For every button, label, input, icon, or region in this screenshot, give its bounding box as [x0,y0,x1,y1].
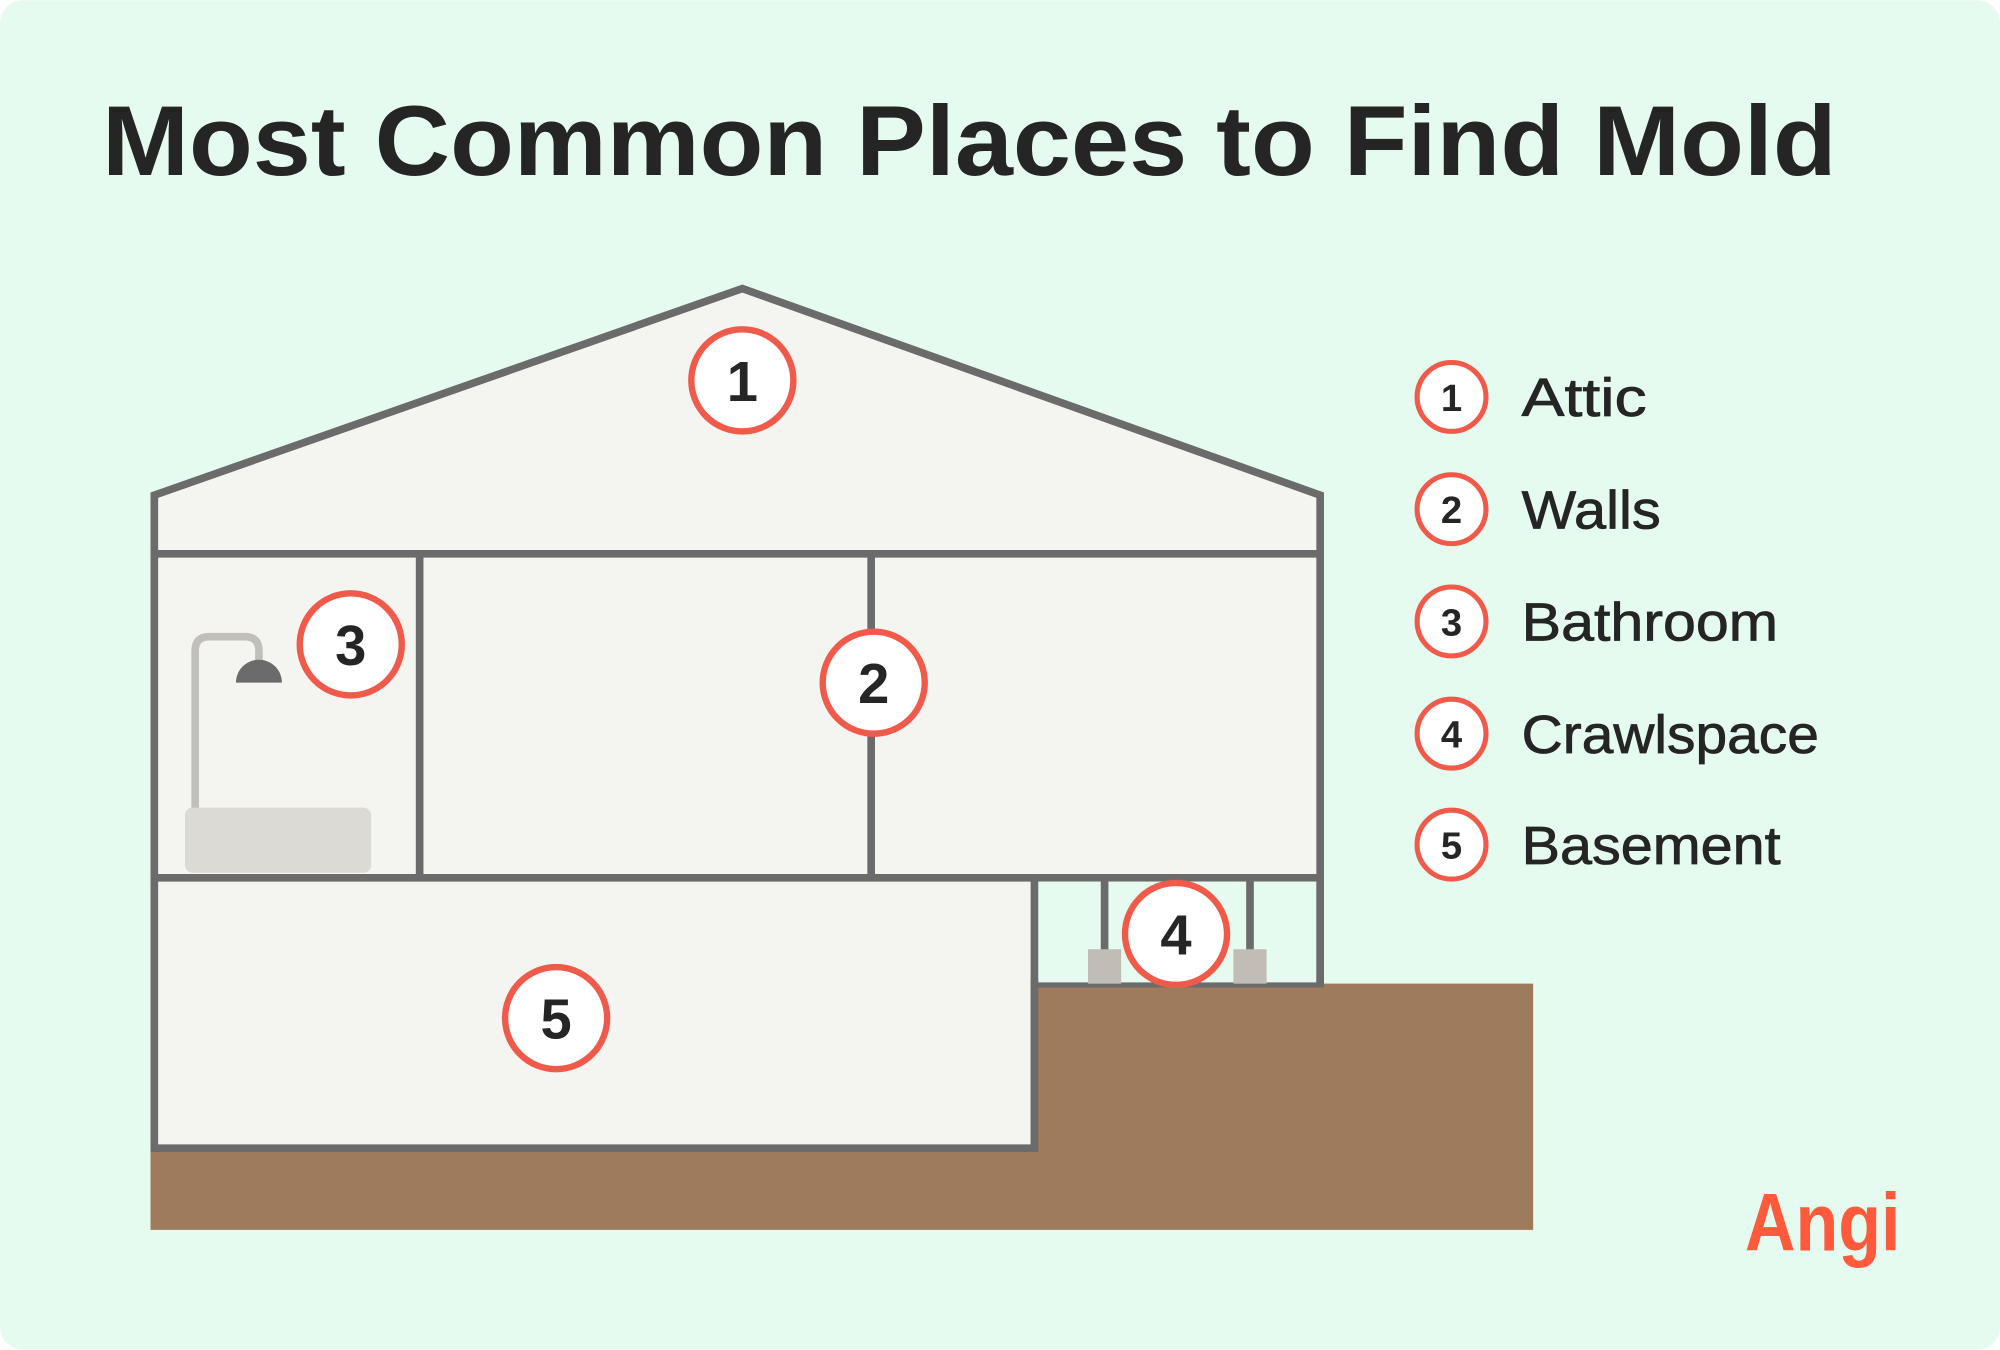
house markers: 1 [727,350,758,413]
legend: Walls [1522,481,1661,540]
icon: shower and tub [185,637,371,873]
legend: Attic [1522,369,1647,428]
logo: Angi [1745,1177,1901,1268]
legend: Bathroom [1522,594,1778,653]
crawlspace gap [1038,882,1316,982]
legend: 1 [1441,377,1462,420]
house markers: 5 [541,988,572,1051]
house markers: 4 [1160,903,1192,966]
legend: 2 [1441,489,1462,532]
legend: 4 [1441,714,1463,757]
legend: Crawlspace [1522,706,1819,765]
title: Most Common Places to Find Mold [102,86,1837,197]
crawlspace footings [1088,949,1267,984]
house markers [300,329,1227,1069]
house [154,289,1320,1148]
legend: Basement [1522,817,1781,876]
house markers: 2 [858,652,889,715]
legend [1417,362,1819,879]
legend: 3 [1441,601,1462,644]
house markers: 3 [335,614,366,677]
ground [151,984,1533,1230]
legend: 5 [1441,825,1462,868]
